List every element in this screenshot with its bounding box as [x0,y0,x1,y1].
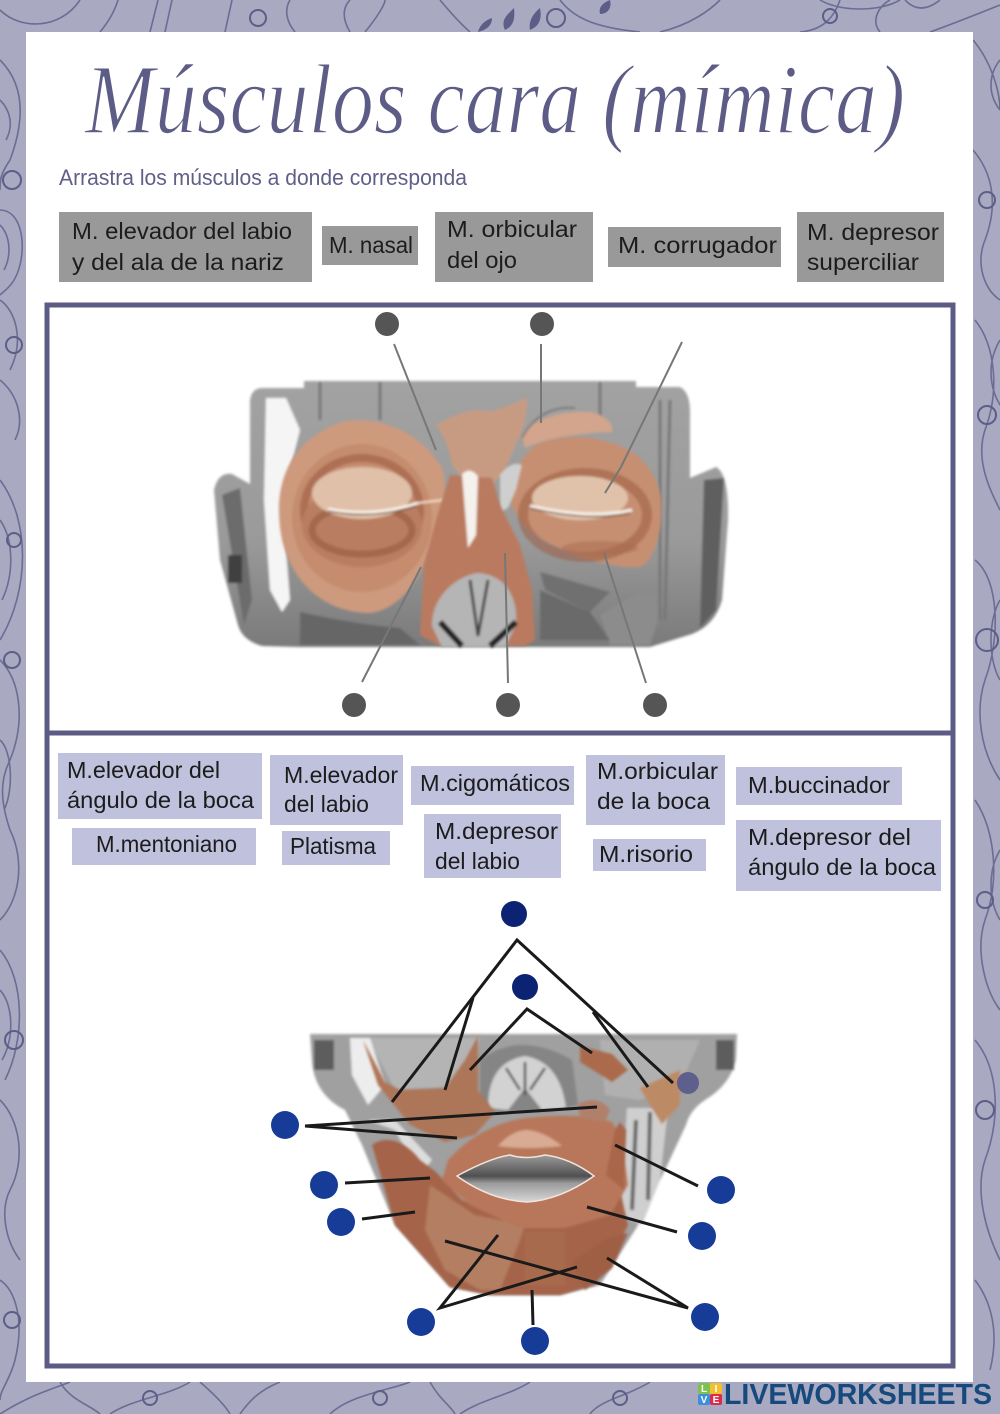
chip: depresor del labio: M.depresor [435,818,558,844]
chip: depresor del angulo de la boca [736,820,941,891]
chip: elevador del angulo de la boca [58,753,262,819]
chip: orbicular del ojo [435,212,593,282]
icon: live tiles: V [701,1395,708,1406]
nose muscle and cartilage [420,470,535,647]
logo: liveworksheets watermark: LIVEWORKSHEETS [724,1379,992,1411]
icon: live tiles: L [701,1384,707,1395]
chip: depresor superciliar: M. depresor [807,219,939,245]
chip: depresor del angulo de la boca: M.depresor del [748,824,911,850]
drop targets [271,901,735,1355]
chip: depresor superciliar [797,212,944,282]
instruction text: Arrastra los músculos a donde corresponda [59,165,468,190]
cheek, chin and mouth muscles [363,1036,680,1295]
chip: elevador del labio: del labio [284,791,369,817]
procerus and corrugator [436,398,613,512]
chip: orbicular del ojo: M. orbicular [447,216,577,242]
black leader lines [305,940,698,1325]
illustration: upper face muscles [214,312,728,717]
icon: live tiles [698,1383,722,1406]
chip: mentoniano [72,828,256,865]
grey jaw base [310,1034,737,1295]
chip: elevador del labio: M.elevador [284,762,398,788]
word bank: eye and nose muscles [59,212,944,282]
ears and grey base [214,381,728,647]
chip: cigomaticos: M.cigomáticos [420,770,570,796]
chip: depresor del labio: del labio [435,848,520,874]
lips [457,1155,594,1202]
chip: depresor superciliar: superciliar [807,249,919,275]
chip: depresor del angulo de la boca: ángulo de la boca [748,854,936,880]
chip: buccinador: M.buccinador [748,772,890,798]
chip: buccinador [736,767,902,805]
chip: orbicular de la boca: de la boca [597,788,710,814]
chip: depresor del labio [424,814,561,878]
chip: platisma: Platisma [290,833,376,859]
chip: mentoniano: M.mentoniano [96,831,237,857]
chip: platisma [282,831,390,865]
left orbicularis oculi [279,420,445,613]
chip: elevador del labio y ala de la nariz: y del ala de la nariz [72,249,284,275]
icon: live tiles: E [713,1395,720,1406]
chip: corrugador: M. corrugador [618,232,777,258]
chip: nasal: M. nasal [329,232,413,258]
chip: risorio: M.risorio [599,841,693,867]
chip: risorio [593,839,706,871]
panel frame: upper and lower sections [47,305,953,1366]
chip: orbicular de la boca [586,755,725,825]
chip: elevador del labio [270,755,403,825]
word bank: mouth and chin muscles [58,753,941,891]
nose cartilage [480,1045,578,1112]
right orbicularis oculi [511,437,661,567]
chip: cigomaticos [411,766,574,805]
leader lines [362,342,682,683]
chip: elevador del labio y ala de la nariz: M. elevador del labio [72,218,292,244]
chip: elevador del labio y ala de la nariz [59,212,312,282]
chip: elevador del angulo de la boca: ángulo de la boca [67,787,254,813]
chip: elevador del angulo de la boca: M.elevador del [67,757,220,783]
icon: live tiles: I [715,1384,718,1395]
chip: corrugador [608,227,781,267]
chip: orbicular del ojo: del ojo [447,247,517,273]
drop targets [342,312,667,717]
illustration: lower face muscles [271,901,737,1355]
chip: nasal [322,226,418,265]
chip: orbicular de la boca: M.orbicular [597,758,718,784]
